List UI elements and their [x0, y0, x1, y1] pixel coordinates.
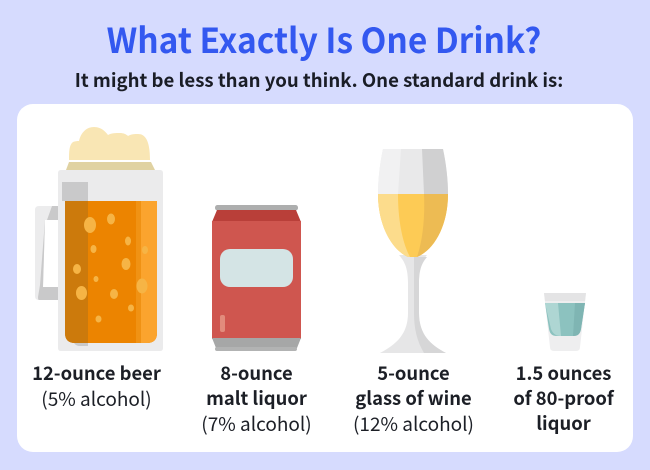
- label: wine: (12% alcohol): [353, 410, 474, 437]
- label: liquor: [513, 360, 614, 436]
- label: wine: 5-ounce: [377, 360, 450, 386]
- label: malt liquor: malt liquor: [206, 385, 307, 411]
- label: liquor: 1.5 ounces: [516, 360, 611, 386]
- label: wine: [353, 360, 474, 437]
- label: beer: 12-ounce beer: [32, 360, 161, 386]
- icon: malt liquor can: [212, 205, 301, 351]
- label: liquor: of 80-proof: [513, 385, 614, 411]
- label: malt liquor: [201, 360, 312, 437]
- subtitle: It might be less than you think. One standard drink is:: [75, 66, 563, 93]
- label: malt liquor: 8-ounce: [220, 360, 293, 386]
- label: beer: (5% alcohol): [41, 385, 152, 412]
- label: liquor: liquor: [536, 410, 591, 436]
- icon: beer mug: [35, 127, 163, 351]
- label: wine: glass of wine: [355, 385, 472, 411]
- label: malt liquor: (7% alcohol): [201, 410, 312, 437]
- title: What Exactly Is One Drink?: [107, 13, 541, 63]
- icon: wine glass: [378, 149, 448, 353]
- icon: shot glass: [544, 293, 586, 351]
- label: beer: [32, 360, 161, 412]
- panel: white card: [17, 104, 633, 452]
